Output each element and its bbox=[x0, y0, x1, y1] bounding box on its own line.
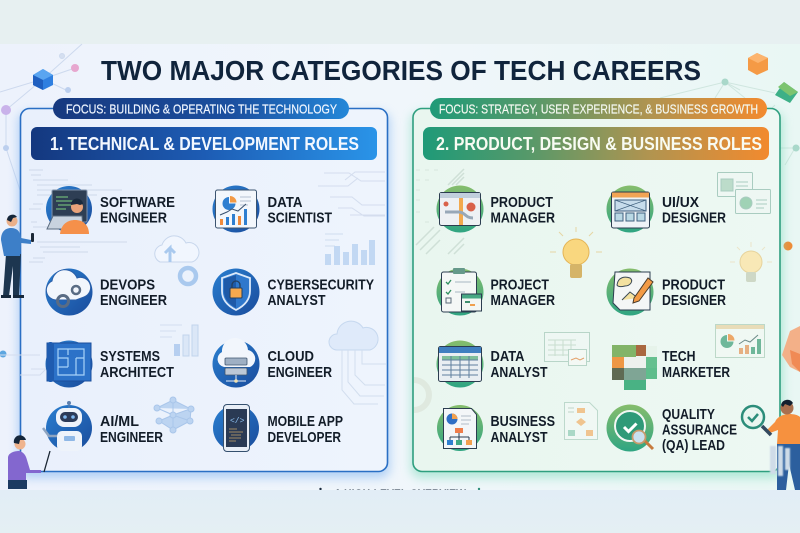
label: data scientist: SCIENTIST bbox=[268, 210, 332, 226]
role: data analyst bbox=[436, 340, 484, 388]
label: cloud engineer: CLOUD bbox=[268, 348, 314, 365]
label: tech marketer: MARKETER bbox=[662, 364, 730, 381]
label: mobile app developer bbox=[268, 413, 343, 446]
role: software engineer bbox=[46, 186, 92, 234]
decoration: spreadsheet cards bbox=[544, 332, 590, 366]
icon: orange cube bbox=[748, 53, 768, 75]
label: project manager: PROJECT bbox=[490, 276, 549, 294]
label: cybersecurity analyst bbox=[268, 276, 374, 309]
decoration: wireframe cards bbox=[718, 172, 770, 214]
decoration: faint bar chart bbox=[325, 234, 375, 265]
label: systems architect: ARCHITECT bbox=[100, 364, 174, 381]
label: software engineer: ENGINEER bbox=[100, 210, 167, 226]
role: systems architect bbox=[46, 340, 92, 388]
icon: green cube bbox=[775, 82, 798, 103]
label: devops engineer: ENGINEER bbox=[100, 292, 167, 309]
role: data scientist bbox=[212, 186, 260, 232]
panel: product, design and business roles bbox=[411, 98, 783, 478]
figure: person with phone bbox=[1, 215, 34, 298]
label: software engineer bbox=[100, 194, 175, 226]
label: systems architect bbox=[100, 348, 174, 381]
figure: person with magnifier bbox=[742, 400, 800, 490]
role: ai/ml engineer bbox=[43, 401, 92, 451]
label: product manager bbox=[490, 194, 555, 226]
label: business analyst bbox=[490, 413, 555, 446]
icon: blue cube bbox=[33, 69, 53, 90]
focus pill: FOCUS: BUILDING & OPERATING THE TECHNOLOGY bbox=[66, 102, 338, 116]
label: quality assurance lead: QUALITY bbox=[662, 406, 715, 423]
label: mobile app developer: DEVELOPER bbox=[268, 429, 341, 446]
role: cloud engineer bbox=[212, 338, 260, 388]
decoration: cloud with circuit lines bbox=[329, 321, 386, 404]
label: quality assurance lead: ASSURANCE bbox=[662, 422, 737, 438]
role: tech marketer (pixelated icon) bbox=[612, 345, 657, 390]
label: cloud engineer bbox=[268, 348, 332, 381]
label: project manager bbox=[490, 276, 555, 309]
top band bbox=[0, 0, 800, 44]
label: devops engineer: DEVOPS bbox=[100, 276, 155, 294]
heading: 1. TECHNICAL & DEVELOPMENT ROLES bbox=[50, 134, 359, 154]
focus pill bbox=[53, 98, 349, 119]
label: ai/ml engineer: ENGINEER bbox=[100, 429, 163, 446]
label: mobile app developer: MOBILE APP bbox=[268, 413, 343, 430]
label: project manager: MANAGER bbox=[490, 292, 555, 309]
label: quality assurance lead bbox=[662, 406, 737, 454]
label: cloud engineer: ENGINEER bbox=[268, 364, 332, 381]
right network decoration bbox=[660, 78, 800, 250]
label: product designer: DESIGNER bbox=[662, 292, 726, 309]
bottom band bbox=[0, 490, 800, 533]
label: data analyst bbox=[490, 348, 548, 381]
decoration: faint gear bbox=[414, 380, 429, 410]
label: business analyst: BUSINESS bbox=[490, 413, 555, 430]
label: devops engineer bbox=[100, 276, 167, 309]
label: business analyst: ANALYST bbox=[490, 429, 548, 446]
decoration: flowchart card bbox=[564, 402, 598, 440]
figure: person with laptop bbox=[8, 435, 50, 489]
title: TWO MAJOR CATEGORIES OF TECH CAREERS bbox=[101, 55, 701, 86]
decoration: faint chart bbox=[160, 325, 198, 356]
label: ui/ux designer: DESIGNER bbox=[662, 210, 726, 226]
decoration: faint dots and hatching bbox=[416, 169, 464, 254]
role: product designer bbox=[606, 268, 654, 316]
heading: 2. PRODUCT, DESIGN & BUSINESS ROLES bbox=[436, 134, 762, 154]
focus pill bbox=[430, 98, 767, 119]
decoration: orange shape at right edge bbox=[782, 326, 800, 372]
left network decoration bbox=[0, 44, 82, 358]
label: product manager: MANAGER bbox=[490, 210, 555, 226]
panel: technical and development roles bbox=[0, 98, 390, 478]
label: product designer bbox=[662, 276, 726, 309]
label: quality assurance lead: (QA) LEAD bbox=[662, 437, 725, 454]
decoration: lightbulb one bbox=[550, 227, 602, 278]
decoration: chart card bbox=[716, 324, 764, 358]
label: software engineer: SOFTWARE bbox=[100, 194, 175, 211]
label: ui/ux designer: UI/UX bbox=[662, 194, 699, 211]
label: ai/ml engineer bbox=[100, 413, 163, 446]
label: tech marketer: TECH bbox=[662, 348, 696, 365]
label: cybersecurity analyst: ANALYST bbox=[268, 292, 326, 309]
role: mobile app developer: </> bbox=[230, 417, 245, 426]
label: ai/ml engineer: AI/ML bbox=[100, 413, 139, 430]
label: systems architect: SYSTEMS bbox=[100, 348, 160, 365]
label: product designer: PRODUCT bbox=[662, 276, 725, 294]
role: project manager bbox=[436, 268, 484, 316]
role: cybersecurity analyst bbox=[212, 268, 260, 316]
role: product manager bbox=[436, 186, 484, 232]
label: data analyst: DATA bbox=[490, 348, 525, 365]
decoration: lightbulb two bbox=[730, 242, 772, 282]
label: ui/ux designer bbox=[662, 194, 726, 226]
role: ui/ux designer bbox=[606, 186, 654, 232]
label: cybersecurity analyst: CYBERSECURITY bbox=[268, 276, 374, 294]
role: business analyst bbox=[437, 405, 483, 451]
role: quality assurance lead bbox=[606, 404, 654, 452]
heading bbox=[31, 127, 377, 160]
label: tech marketer bbox=[662, 348, 730, 381]
decoration: neural network bbox=[154, 397, 194, 433]
decoration: circuit lines bbox=[0, 172, 385, 375]
role: mobile app developer bbox=[213, 404, 259, 452]
label: product manager: PRODUCT bbox=[490, 194, 553, 211]
label: data analyst: ANALYST bbox=[490, 364, 548, 381]
label: data scientist: DATA bbox=[268, 194, 303, 211]
label: data scientist bbox=[268, 194, 332, 226]
heading bbox=[423, 127, 769, 160]
decoration: faint code bbox=[29, 170, 127, 262]
role: devops engineer bbox=[46, 268, 92, 316]
decoration: faint cloud and gears bbox=[155, 236, 199, 284]
overview caption: A HIGH-LEVEL OVERVIEW bbox=[334, 489, 466, 501]
